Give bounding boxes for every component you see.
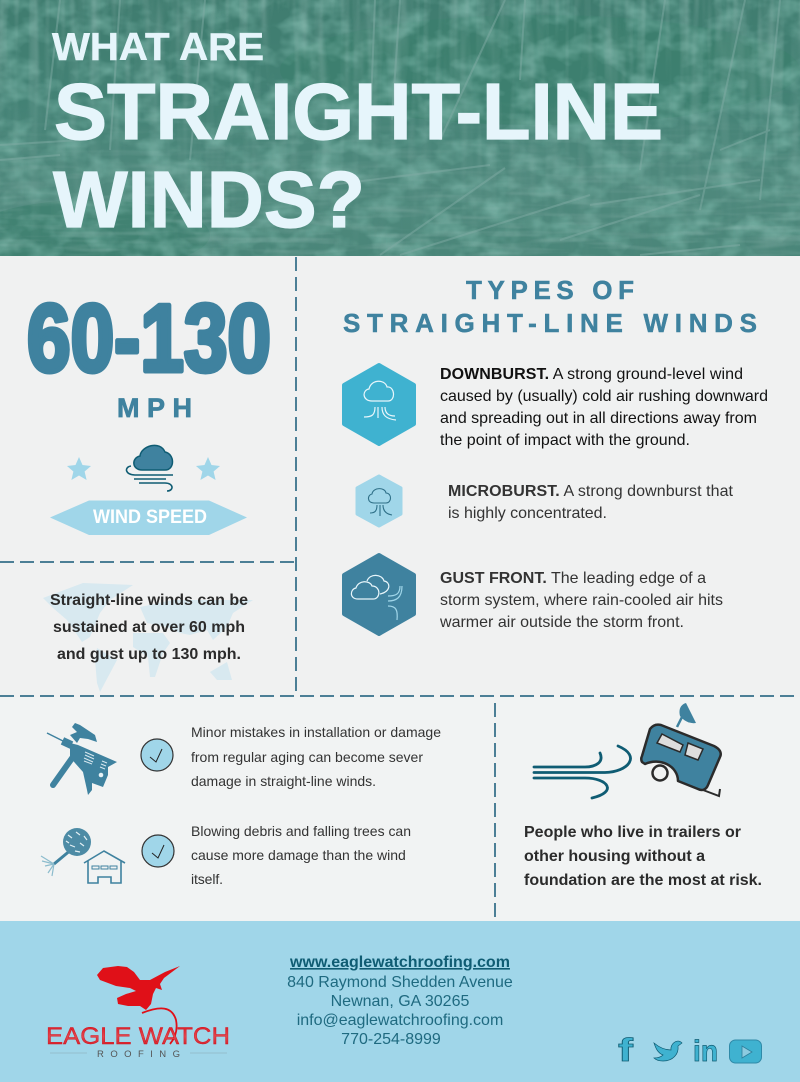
text: debris [191, 823, 411, 887]
icon: tree and house [41, 828, 125, 883]
panel: wind speed [27, 285, 271, 692]
text: microburst: MICROBURST. A strong downburst that [448, 483, 734, 500]
icon: right star [196, 457, 220, 480]
unit: MPH: MPH [117, 393, 192, 423]
text: trailers at risk [524, 824, 762, 889]
text: debris: cause more damage than the wind [191, 847, 406, 863]
contact details: www.eaglewatchroofing.com [289, 954, 510, 971]
text: installation mistakes: damage in straight-line winds. [191, 773, 376, 789]
text: debris: Blowing debris and falling trees can [191, 823, 411, 839]
text: gust front [439, 570, 723, 631]
text: installation mistakes: Minor mistakes in installation or damage [191, 724, 441, 740]
social icons [618, 1032, 762, 1068]
icon: twitter [654, 1041, 682, 1061]
text: trailers at risk: foundation are the most at risk. [524, 872, 762, 889]
description text: Straight-line winds can be [50, 592, 248, 609]
heading: types of straight-line winds: TYPES OF [466, 275, 634, 305]
text: debris: itself. [191, 871, 223, 887]
description text: sustained at over 60 mph [53, 619, 245, 636]
text: gust front: warmer air outside the storm front. [439, 614, 684, 631]
text: gust front: GUST FRONT. The leading edge of a [440, 570, 706, 587]
description text [50, 592, 248, 663]
title [52, 26, 663, 244]
icon: check 1 [141, 739, 173, 771]
world map watermark [43, 583, 253, 692]
text: downburst: the point of impact with the ground. [440, 432, 690, 449]
text: installation mistakes: from regular aging can become sever [191, 749, 423, 765]
text: microburst: is highly concentrated. [448, 505, 607, 522]
lower panel background [0, 697, 800, 921]
big number: 60-130: 60-130 [27, 285, 271, 392]
footer [0, 921, 800, 1082]
icon: downburst hexagon [344, 365, 414, 444]
icon: check 2 [142, 835, 174, 867]
text: microburst [448, 483, 734, 522]
logo: eagle watch roofing [46, 966, 230, 1060]
icon: wind blowing trailer [534, 703, 721, 798]
text: trailers at risk: People who live in trailers or [524, 824, 741, 841]
banner: wind speed [50, 500, 247, 535]
contact details: Newnan, GA 30265 [331, 993, 469, 1010]
icon: cloud with wind [126, 445, 173, 491]
text: gust front: storm system, where rain-cooled air hits [440, 592, 723, 609]
text: installation mistakes [191, 724, 441, 789]
description text: and gust up to 130 mph. [57, 646, 241, 663]
icon: linkedin: in [693, 1035, 718, 1068]
title: WINDS? [53, 155, 365, 244]
icon: drill and hammer [47, 723, 117, 795]
contact details: info@eaglewatchroofing.com [297, 1012, 503, 1029]
heading: types of straight-line winds [343, 275, 757, 338]
icon: gust front hexagon [344, 555, 414, 634]
header photo: flattened forest [0, 0, 800, 270]
icon: microburst hexagon [357, 476, 401, 526]
text: downburst: and spreading out in all directions away from [440, 410, 757, 427]
heading: types of straight-line winds: STRAIGHT-LINE WINDS [343, 308, 757, 338]
title: STRAIGHT-LINE [54, 67, 663, 156]
text: downburst [440, 366, 768, 449]
banner: wind speed: WIND SPEED [93, 506, 207, 528]
text: downburst: DOWNBURST. A strong ground-level wind [440, 366, 743, 383]
icon: left star [67, 457, 91, 480]
title: WHAT ARE [52, 26, 264, 69]
contact details [287, 954, 513, 1048]
icon: facebook: f [618, 1032, 633, 1068]
text: downburst: caused by (usually) cold air rushing downward [440, 388, 768, 405]
logo: eagle watch roofing: ROOFING [97, 1049, 180, 1060]
contact details: 770-254-8999 [341, 1031, 441, 1048]
logo: eagle watch roofing: EAGLE WATCH [46, 1023, 230, 1050]
text: trailers at risk: other housing without a [524, 848, 705, 865]
icon: youtube [730, 1040, 762, 1063]
contact details: 840 Raymond Shedden Avenue [287, 974, 513, 991]
